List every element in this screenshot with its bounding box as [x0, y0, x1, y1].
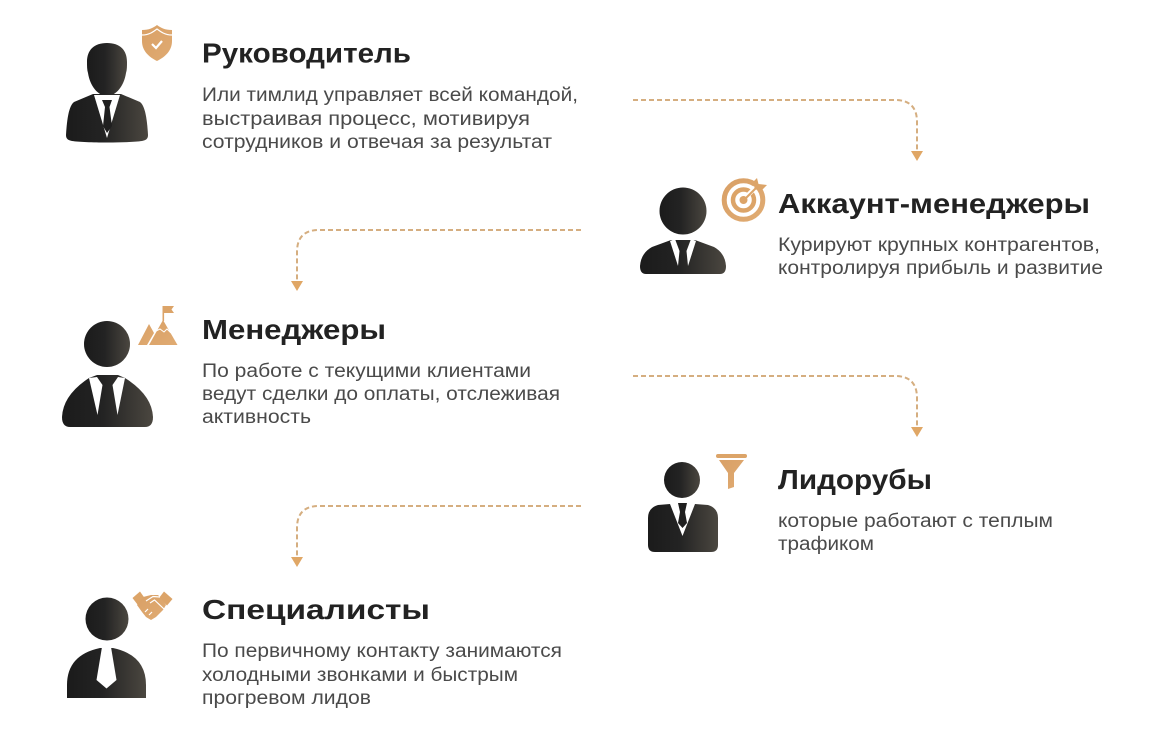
description: По первичному контакту занимаются — [202, 641, 562, 662]
panel: Менеджеры — [62, 306, 560, 428]
arrow: to specialists — [291, 506, 581, 567]
icon: manager person — [62, 321, 153, 427]
icon: specialist person — [67, 598, 146, 698]
description — [202, 361, 560, 428]
description: активность — [202, 407, 311, 428]
description: сотрудников и отвечая за результат — [202, 132, 552, 153]
description — [202, 641, 562, 709]
icon: handshake — [132, 592, 172, 620]
arrow: to managers — [291, 230, 581, 291]
panel: Аккаунт-менеджеры — [640, 178, 1103, 279]
heading: Руководитель — [202, 38, 411, 68]
icon: account manager person — [640, 188, 726, 274]
description: холодными звонками и быстрым — [202, 665, 518, 686]
description — [778, 511, 1053, 555]
description: выстраивая процесс, мотивируя — [202, 109, 530, 130]
icon: shield — [142, 25, 172, 61]
panel: Лидорубы — [648, 454, 1053, 555]
description: трафиком — [778, 534, 874, 555]
description: По работе с текущими клиентами — [202, 361, 531, 382]
description: контролируя прибыль и развитие — [778, 258, 1103, 279]
heading: Лидорубы — [778, 464, 932, 495]
description — [778, 235, 1103, 279]
description: прогревом лидов — [202, 688, 371, 709]
arrow: to lead hunters — [633, 376, 923, 437]
icon: manager person — [66, 43, 148, 142]
description: которые работают с теплым — [778, 511, 1053, 532]
description: Курируют крупных контрагентов, — [778, 235, 1100, 256]
icon: mountain with flag — [138, 306, 178, 345]
panel: Специалисты — [67, 592, 562, 709]
arrow: to account managers — [633, 100, 923, 161]
icon: target — [724, 178, 767, 219]
heading: Специалисты — [202, 594, 430, 625]
description — [202, 85, 578, 153]
heading: Менеджеры — [202, 314, 386, 345]
icon: lead hunter person — [648, 462, 718, 552]
panel: Руководитель — [66, 25, 578, 153]
heading: Аккаунт-менеджеры — [778, 188, 1090, 219]
description: Или тимлид управляет всей командой, — [202, 85, 578, 106]
description: ведут сделки до оплаты, отслеживая — [202, 384, 560, 405]
icon: funnel — [716, 454, 747, 489]
